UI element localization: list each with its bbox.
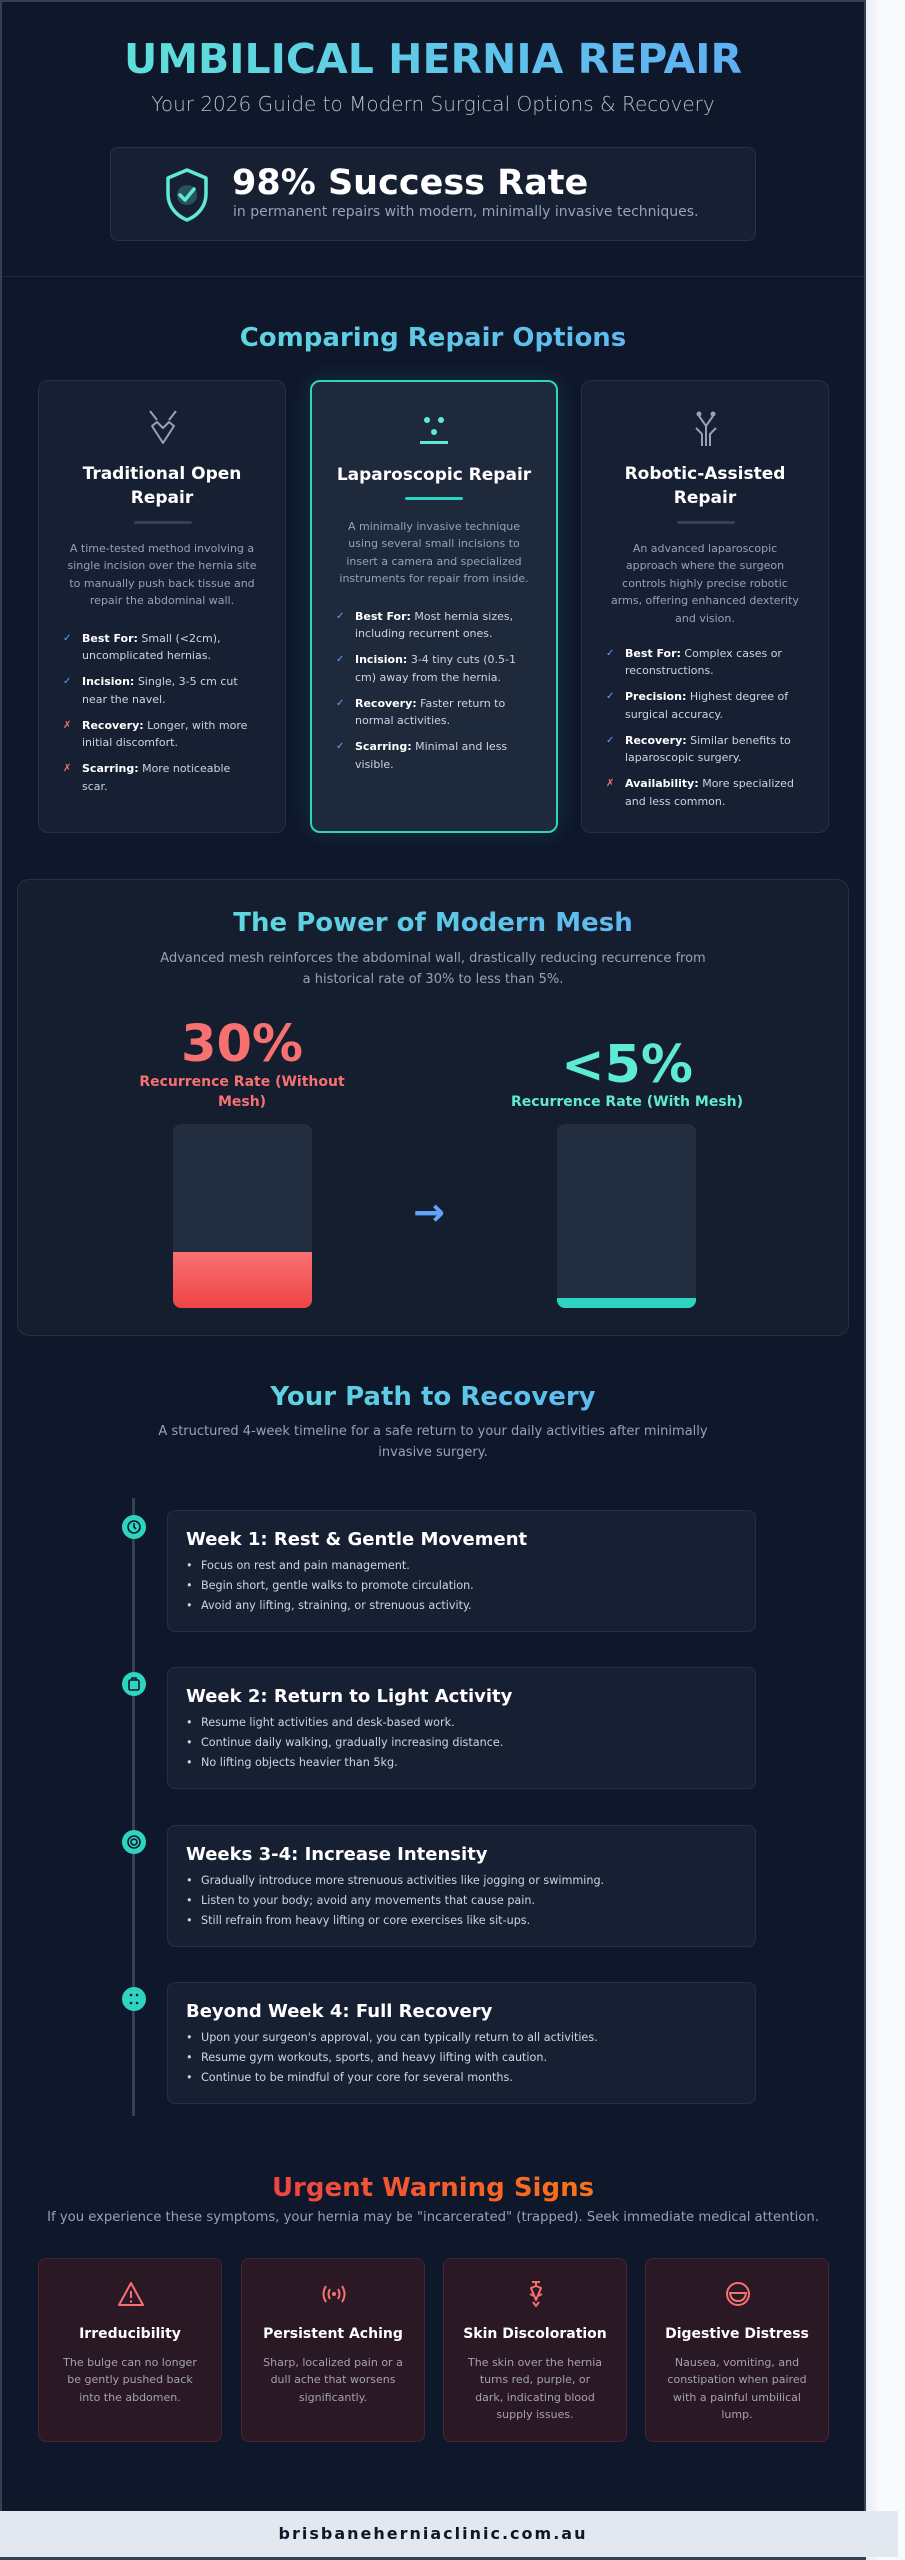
timeline card: week 1: Begin short, gentle walks to promote circulation.: [201, 1579, 474, 1592]
warning card: skin discoloration: Skin Discoloration: [463, 2326, 607, 2342]
description: repair the abdominal wall.: [90, 594, 234, 607]
warning card: skin discoloration: The skin over the hernia: [468, 2356, 602, 2369]
warning card: digestive distress: lump.: [721, 2408, 753, 2421]
timeline: [132, 1498, 135, 2116]
pros and cons list: ✓: [606, 648, 614, 659]
number <5%: <5%: [561, 1035, 693, 1095]
warning card: persistent aching: significantly.: [299, 2391, 367, 2404]
description: and vision.: [675, 612, 735, 625]
pros and cons list: ✓: [606, 691, 614, 702]
pros and cons list: ✗: [63, 720, 71, 731]
timeline card: beyond week 4: Continue to be mindful of your core for several months.: [201, 2071, 513, 2084]
description: approach where the surgeon: [626, 559, 784, 572]
title: [625, 464, 785, 508]
pros list: Best For: Most hernia sizes, including recurrent ones.: [355, 610, 513, 640]
warning card: irreducibility: [38, 2258, 222, 2442]
panel: robotic-assisted repair: [581, 380, 829, 833]
pros and cons list: ✗: [606, 778, 614, 789]
pros list: Incision: 3-4 tiny cuts (0.5-1 cm) away from the hernia.: [355, 653, 516, 684]
timeline card: week 2: Resume light activities and desk-based work.: [201, 1716, 455, 1729]
timeline marker: week 1: [122, 1515, 146, 1539]
pros and cons list: ✓: [63, 676, 71, 687]
footer url: brisbaneherniaclinic.com.au: [279, 2524, 587, 2543]
icon: open incision: [149, 410, 177, 444]
label: Recurrence Rate (Without Mesh): [139, 1074, 345, 1110]
timeline card: week 1: Week 1: Rest & Gentle Movement: [186, 1529, 527, 1550]
arrow: →: [413, 1190, 445, 1234]
pros and cons list: ✗: [63, 763, 71, 774]
title: Repair: [131, 488, 193, 508]
pros and cons list: ✓: [63, 633, 71, 644]
timeline card: weeks 3-4: [167, 1825, 756, 1947]
timeline card: beyond week 4: Upon your surgeon's approval, you can typically return to all activities.: [201, 2031, 598, 2044]
warning card: skin discoloration: turns red, purple, or: [480, 2373, 590, 2386]
timeline card: weeks 3-4: Gradually introduce more strenuous activities like jogging or swimming.: [201, 1874, 604, 1887]
heading: comparing repair options: Comparing Repair Options: [240, 323, 626, 353]
stat: with mesh: [511, 1035, 743, 1110]
timeline card: week 1: [167, 1510, 756, 1632]
footer: [0, 2511, 898, 2557]
pros and cons list: Scarring: More noticeable: [82, 762, 230, 775]
heading: your path to recovery: [0, 1381, 866, 1413]
title: Robotic-Assisted: [625, 464, 785, 484]
icon: warning triangle: [118, 2282, 144, 2306]
timeline card: week 2: No lifting objects heavier than 5kg.: [201, 1756, 398, 1769]
timeline marker: week 2: [122, 1672, 146, 1696]
warning card: persistent aching: Sharp, localized pain or a: [263, 2356, 403, 2369]
pros and cons list: Recovery: Similar benefits to laparoscopic surgery.: [625, 734, 791, 764]
pros list: ✓: [336, 611, 344, 622]
warning card: persistent aching: [241, 2258, 425, 2442]
warning card: irreducibility: Irreducibility: [79, 2326, 181, 2342]
description: controls highly precise robotic: [622, 577, 788, 590]
bar: with mesh: [557, 1124, 696, 1308]
pros and cons list: scar.: [82, 780, 108, 793]
timeline card: beyond week 4: Beyond Week 4: Full Recovery: [186, 2001, 492, 2022]
description: single incision over the hernia site: [68, 559, 256, 572]
description: [339, 520, 529, 585]
description: A minimally invasive technique: [348, 520, 520, 533]
warning card: digestive distress: Digestive Distress: [665, 2326, 809, 2342]
title: Laparoscopic Repair: [337, 465, 531, 485]
heading: The Power of Modern Mesh: [233, 908, 633, 938]
warning card: persistent aching: Persistent Aching: [263, 2326, 403, 2342]
warning card: skin discoloration: supply issues.: [496, 2408, 574, 2421]
pros and cons list: Availability: More specialized and less common.: [625, 777, 794, 808]
description: using several small incisions to: [348, 537, 520, 550]
heading: comparing repair options: [0, 322, 866, 354]
pros and cons list: Precision: Highest degree of surgical accuracy.: [625, 690, 788, 721]
timeline card: week 1: Avoid any lifting, straining, or strenuous activity.: [201, 1599, 472, 1612]
panel: power of modern mesh: [17, 879, 849, 1336]
warning card: irreducibility: The bulge can no longer: [63, 2356, 197, 2369]
icon: shield check: [166, 168, 208, 222]
timeline card: weeks 3-4: Weeks 3-4: Increase Intensity: [186, 1844, 488, 1865]
warning card: skin discoloration: [443, 2258, 627, 2442]
warning card: digestive distress: constipation when paired: [667, 2373, 807, 2386]
label: Recurrence Rate (With Mesh): [511, 1094, 743, 1110]
pros and cons list: ✓: [606, 735, 614, 746]
timeline marker: weeks 3-4: [122, 1830, 146, 1854]
description: a historical rate of 30% to less than 5%.: [303, 972, 563, 987]
heading: your path to recovery: Your Path to Recovery: [270, 1382, 596, 1412]
header title: UMBILICAL HERNIA REPAIR: [124, 35, 742, 83]
timeline card: weeks 3-4: Still refrain from heavy lifting or core exercises like sit-ups.: [201, 1914, 530, 1927]
warning card: skin discoloration: dark, indicating blood: [475, 2391, 595, 2404]
timeline card: week 2: Continue daily walking, gradually increasing distance.: [201, 1736, 503, 1749]
description: Advanced mesh reinforces the abdominal wall, drastically reducing recurrence from: [160, 951, 706, 966]
icon: pain waves: [322, 2286, 346, 2302]
timeline card: week 1: Focus on rest and pain management.: [201, 1559, 410, 1572]
timeline card: week 2: Week 2: Return to Light Activity: [186, 1686, 512, 1707]
heading: urgent warning signs: Urgent Warning Signs: [272, 2173, 594, 2203]
timeline marker: beyond week 4: [122, 1987, 146, 2011]
description: An advanced laparoscopic: [633, 542, 777, 555]
warning card: digestive distress: with a painful umbilical: [673, 2391, 801, 2404]
title: Traditional Open: [83, 464, 241, 484]
timeline card: week 2: [167, 1667, 756, 1789]
description: arms, offering enhanced dexterity: [611, 594, 799, 607]
pros and cons list: Recovery: Longer, with more initial discomfort.: [82, 719, 247, 749]
pros list: ✓: [336, 654, 344, 665]
bar: without mesh: [173, 1124, 312, 1308]
pros and cons list: Best For: Small (<2cm), uncomplicated hernias.: [82, 632, 221, 662]
recovery description: A structured 4-week timeline for a safe return to your daily activities after minimally invasive surgery.: [158, 1424, 708, 1460]
icon: stomach: [726, 2282, 750, 2306]
success rate box: [110, 147, 756, 241]
pros and cons list: [63, 632, 247, 793]
pros list: Scarring: Minimal and less visible.: [355, 740, 507, 771]
panel: laparoscopic repair: [310, 380, 558, 833]
description: [611, 542, 799, 625]
pros list: Recovery: Faster return to normal activities.: [355, 697, 505, 727]
pros list: ✓: [336, 741, 344, 752]
number 30%: 30%: [181, 1015, 303, 1074]
panel: traditional open repair: [38, 380, 286, 833]
stat: without mesh: [139, 1015, 345, 1110]
timeline card: beyond week 4: Resume gym workouts, sports, and heavy lifting with caution.: [201, 2051, 547, 2064]
warning card: digestive distress: [645, 2258, 829, 2442]
title: Repair: [674, 488, 736, 508]
pros list: ✓: [336, 698, 344, 709]
description: to manually push back tissue and: [69, 577, 255, 590]
icon: robotic arms: [695, 412, 717, 446]
warning subtitle: If you experience these symptoms, your hernia may be "incarcerated" (trapped). Seek immediate medical attention.: [47, 2210, 819, 2225]
icon: skin: [530, 2281, 542, 2307]
description: [160, 951, 706, 987]
icon: small incisions: [420, 417, 448, 444]
pros and cons list: Incision: Single, 3-5 cm cut: [82, 675, 238, 688]
timeline card: weeks 3-4: Listen to your body; avoid any movements that cause pain.: [201, 1894, 535, 1907]
header title: [0, 34, 866, 84]
pros and cons list: Best For: Complex cases or reconstructions.: [625, 647, 782, 677]
pros and cons list: [606, 647, 794, 808]
heading: [18, 907, 848, 939]
warning card: irreducibility: be gently pushed back: [67, 2373, 193, 2386]
success rate heading: 98% Success Rate: [232, 163, 588, 203]
warning card: irreducibility: into the abdomen.: [79, 2391, 181, 2404]
title: [82, 464, 241, 508]
timeline card: beyond week 4: [167, 1982, 756, 2104]
pros list: [336, 610, 516, 771]
description: insert a camera and specialized: [346, 555, 522, 568]
pros and cons list: near the navel.: [82, 693, 166, 706]
description: A time-tested method involving a: [70, 542, 254, 555]
success rate caption: in permanent repairs with modern, minimally invasive techniques.: [233, 204, 699, 220]
warning card: digestive distress: Nausea, vomiting, and: [675, 2356, 799, 2369]
description: [68, 542, 256, 607]
description: instruments for repair from inside.: [339, 572, 529, 585]
warning card: persistent aching: dull ache that worsens: [271, 2373, 395, 2386]
header subtitle: Your 2026 Guide to Modern Surgical Options & Recovery: [151, 92, 715, 116]
